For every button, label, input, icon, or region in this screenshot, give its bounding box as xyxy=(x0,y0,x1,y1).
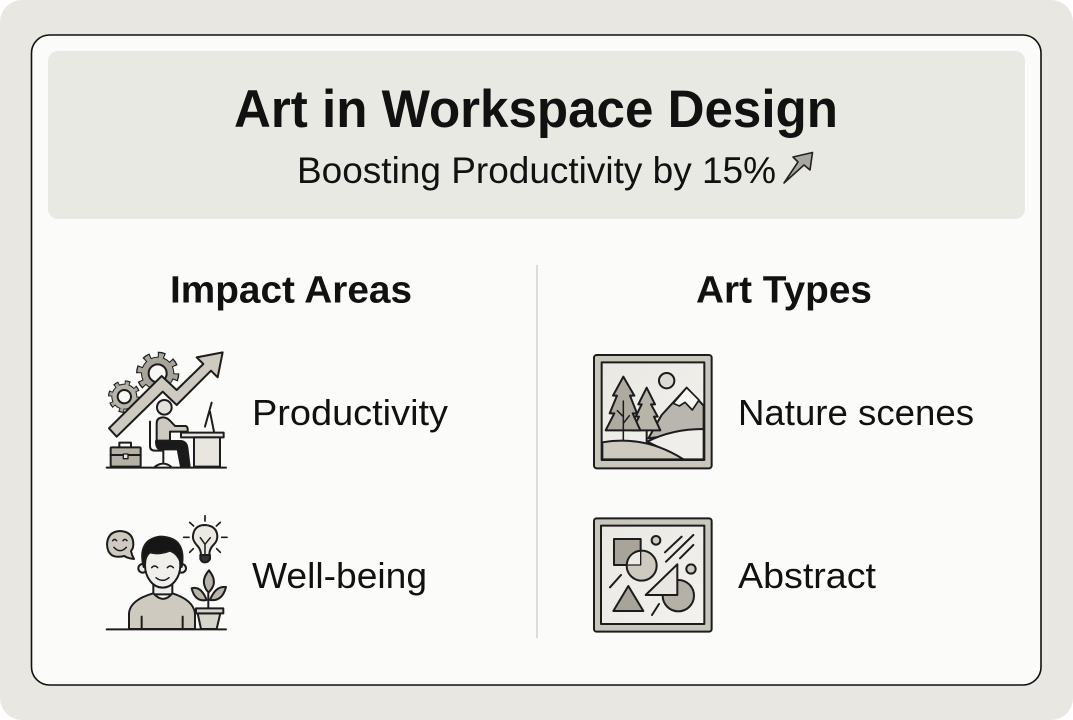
icon: productivity xyxy=(107,352,226,468)
heading: impact areas: Impact Areas xyxy=(170,270,412,312)
label: nature scenes: Nature scenes xyxy=(738,392,974,433)
icon: up-right arrow xyxy=(784,152,812,183)
icon: abstract frame xyxy=(594,518,712,632)
label: productivity: Productivity xyxy=(252,392,448,433)
label: abstract: Abstract xyxy=(738,555,876,596)
panel: art types xyxy=(594,270,974,632)
heading: art types: Art Types xyxy=(696,270,872,312)
header panel xyxy=(48,51,1025,219)
icon: nature scene frame xyxy=(594,355,712,468)
panel: impact areas xyxy=(107,270,448,629)
title: Art in Workspace Design xyxy=(234,80,838,139)
subtitle: Boosting Productivity by 15% xyxy=(297,150,776,191)
icon: well-being xyxy=(107,516,227,629)
label: well-being: Well-being xyxy=(252,555,427,596)
